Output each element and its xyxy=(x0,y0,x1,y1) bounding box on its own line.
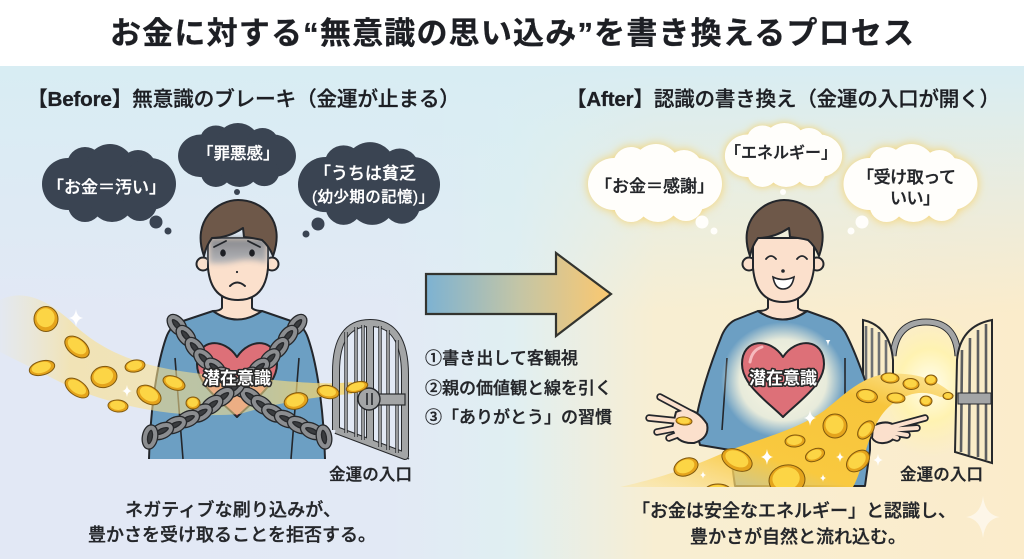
panel: before xyxy=(0,123,440,545)
ears xyxy=(196,258,210,270)
dark thought cloud: guilt xyxy=(178,123,296,195)
worried expression xyxy=(214,241,260,286)
entrance label: after: 金運の入口 xyxy=(900,465,983,484)
gloomy shade xyxy=(209,238,267,264)
caption: after xyxy=(632,501,956,547)
white thought cloud: energy xyxy=(725,123,842,195)
subconscious label: 潜在意識 xyxy=(203,369,271,388)
coin on hand xyxy=(676,416,692,426)
title xyxy=(0,0,1024,66)
heart: subconscious xyxy=(197,343,277,417)
open hand right xyxy=(872,418,925,443)
face xyxy=(208,238,268,300)
arrow: transformation xyxy=(426,253,611,336)
caption: before xyxy=(88,499,376,545)
steps list: ②親の価値観と線を引く xyxy=(425,374,612,399)
glowing heart xyxy=(721,322,845,438)
caption: after: 豊かさが自然と流れ込む。 xyxy=(690,526,906,547)
chains xyxy=(143,315,331,447)
steps list: ③「ありがとう」の習慣 xyxy=(425,403,612,428)
gold stream blocked xyxy=(0,295,352,415)
sweater xyxy=(695,311,870,486)
decorative star xyxy=(966,496,1000,538)
dark thought cloud: poverty memory: (幼少期の記憶)」 xyxy=(312,188,434,206)
closed door xyxy=(336,323,409,459)
caption: after: 「お金は安全なエネルギー」と認識し、 xyxy=(632,501,956,521)
ears xyxy=(742,258,756,270)
white thought cloud: ok to receive xyxy=(844,144,978,234)
white thought cloud: ok to receive: 「受け取って xyxy=(857,168,956,187)
dark thought cloud: money is dirty xyxy=(42,144,176,234)
sweater xyxy=(149,311,325,459)
caption: before: 豊かさを受け取ることを拒否する。 xyxy=(88,525,376,545)
white thought cloud: money is gratitude: 「お金＝感謝」 xyxy=(595,177,714,196)
worried person xyxy=(149,200,325,459)
neck xyxy=(758,290,807,320)
entrance label: before: 金運の入口 xyxy=(329,465,412,484)
white thought cloud: ok to receive: いい」 xyxy=(890,189,940,208)
face xyxy=(753,238,814,302)
neck xyxy=(213,290,262,320)
panel: after xyxy=(588,123,1000,547)
dark thought cloud: poverty memory: 「うちは貧乏 xyxy=(314,164,416,183)
steps list: ①書き出して客観視 xyxy=(425,344,578,369)
dark thought cloud: poverty memory xyxy=(298,142,440,238)
smiling expression xyxy=(766,256,807,289)
heading: before: 【Before】無意識のブレーキ（金運が止まる） xyxy=(27,87,460,111)
heading: after: 【After】認識の書き換え（金運の入口が開く） xyxy=(566,88,1000,111)
caption: before: ネガティブな刷り込みが、 xyxy=(125,499,341,520)
hair xyxy=(747,200,823,256)
coins flowing in xyxy=(673,340,954,487)
white thought cloud: money is gratitude xyxy=(588,144,722,234)
dark thought cloud: money is dirty: 「お金＝汚い」 xyxy=(47,178,166,197)
white thought cloud: energy: 「エネルギー」 xyxy=(725,144,837,162)
subconscious label: 潜在意識 xyxy=(749,369,817,388)
coins blocked xyxy=(28,306,369,413)
dark thought cloud: guilt: 「罪悪感」 xyxy=(197,144,280,163)
steps list xyxy=(425,344,612,428)
gold stream flowing in xyxy=(620,374,955,487)
happy person xyxy=(649,200,925,486)
open door with light xyxy=(863,313,992,463)
title: お金に対する“無意識の思い込み”を書き換えるプロセス xyxy=(110,16,914,51)
hair xyxy=(201,200,277,256)
open hand left xyxy=(649,397,707,443)
